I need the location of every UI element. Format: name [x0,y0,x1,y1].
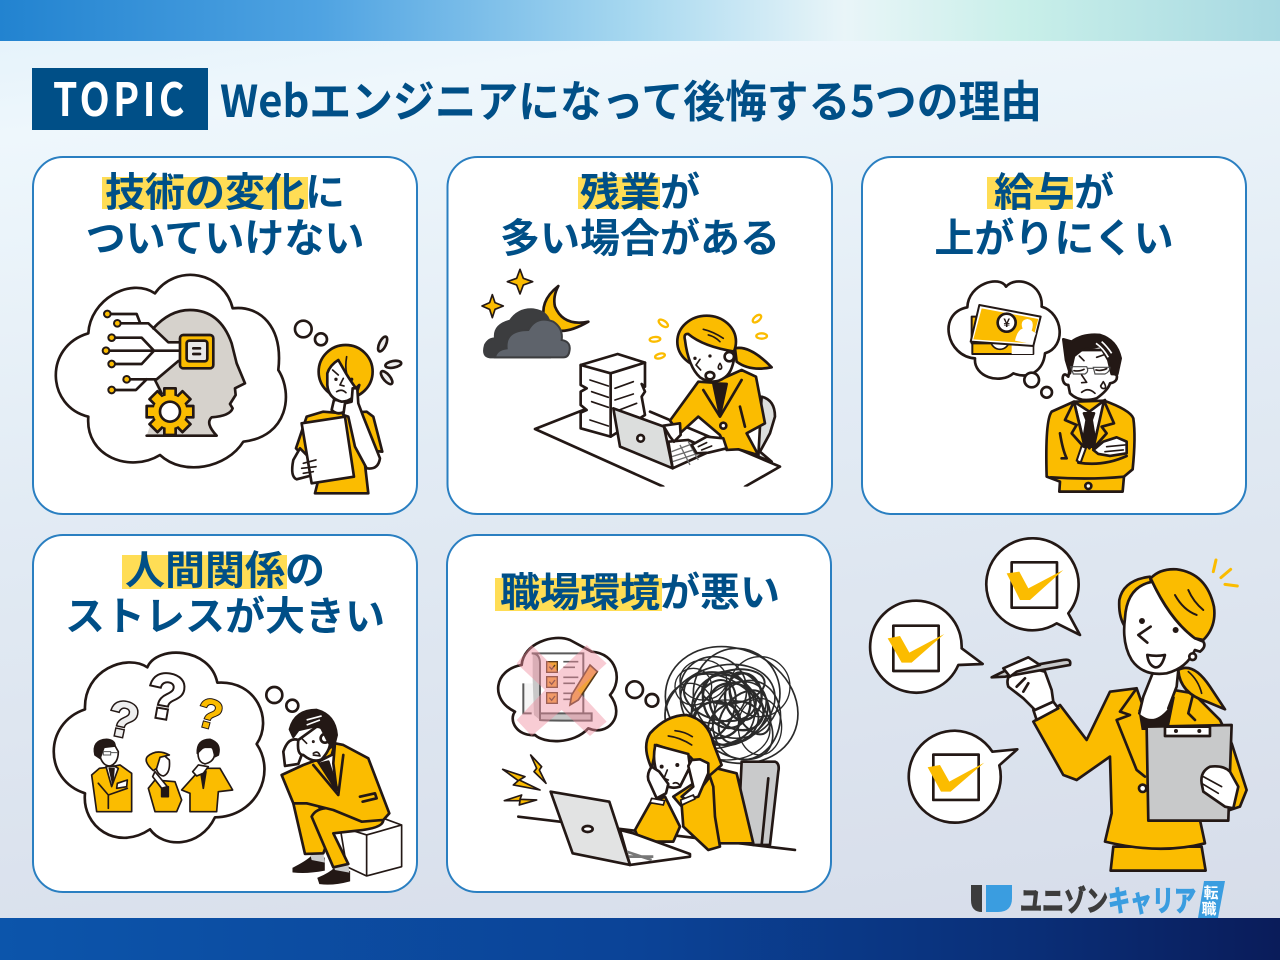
AI head [103,310,245,436]
lightning bolts [503,755,546,805]
title block [32,64,1042,130]
speech bubble check left [870,601,983,693]
topic badge: TOPIC [53,64,188,130]
illustration: thought cloud with AI head and worried woman [56,275,402,493]
clipboard [1147,725,1238,821]
panel: bad workplace [447,535,831,892]
heading: overtime: 残業が [580,160,700,218]
small man left [92,739,132,812]
stool box [340,818,402,876]
logo mark [971,885,1012,912]
overworked woman [663,316,775,462]
frustrated woman [635,715,753,850]
thought cloud [56,275,286,467]
paper stack [581,354,645,437]
panel: overtime [448,157,832,514]
scribble of stress [646,625,817,785]
panel: salary [862,157,1246,514]
moon, stars and clouds [482,269,588,357]
logo badge [1198,881,1225,919]
panic marks [649,313,767,360]
gear [147,388,193,435]
desk [535,410,780,487]
small man right [182,739,233,812]
heading: overtime: 多い場合がある [500,206,780,264]
small woman [146,752,182,812]
heading: technology change: 技術の変化に [105,160,345,218]
laptop [613,408,712,468]
white cover bottom [650,487,763,497]
heading: technology change: ついていけない [86,206,364,264]
thought cloud with banknotes: ¥ [1003,316,1010,330]
thought cloud with people: ? [191,688,228,740]
illustration: woman with checklist speech bubbles [870,538,1247,871]
heading: stress: 人間関係の [125,538,325,596]
presenting woman [992,569,1247,871]
heading: salary [934,160,1174,264]
illustration: overtime night work [482,269,780,497]
heading: stress [65,538,385,642]
title text: Webエンジニアになって後悔する5つの理由 [220,66,1042,130]
worried woman [292,321,402,493]
heading: overtime [500,160,780,264]
logo badge: 転 [1203,882,1219,903]
speech bubble check top [986,538,1080,635]
heading: workplace: 職場環境が悪い [500,560,780,618]
heading: salary: 給与が [994,160,1114,218]
illustration: stress thought and seated man [54,653,402,884]
emphasis marks [1213,560,1237,586]
thought cloud with banknotes [949,281,1060,398]
illustration: salary thought and man [949,281,1134,492]
laptop [551,792,690,865]
heading: technology change [86,160,364,264]
troubled man [1046,335,1134,492]
top gradient band [0,0,1280,41]
thought cloud with crossed checklist [498,638,617,741]
seated man [282,710,389,884]
logo [971,878,1225,920]
bottom gradient band [0,918,1280,960]
panel: technology change [33,157,417,514]
thought cloud with people [54,653,264,842]
small thought bubbles [266,687,298,712]
heading: stress: ストレスが大きい [65,584,385,642]
thought cloud with people: ? [141,659,191,735]
small thought bubbles [626,681,658,707]
logo wordmark: ユニゾンキャリア [1020,878,1196,920]
desk line [518,817,795,850]
illustration: bad workplace [498,625,817,865]
heading: salary: 上がりにくい [934,206,1174,264]
speech bubble check bottom [909,731,1017,823]
panel: human relations stress [33,535,417,892]
logo badge: 職 [1201,898,1217,919]
chair [740,762,779,845]
thought cloud with people: ? [102,689,144,750]
